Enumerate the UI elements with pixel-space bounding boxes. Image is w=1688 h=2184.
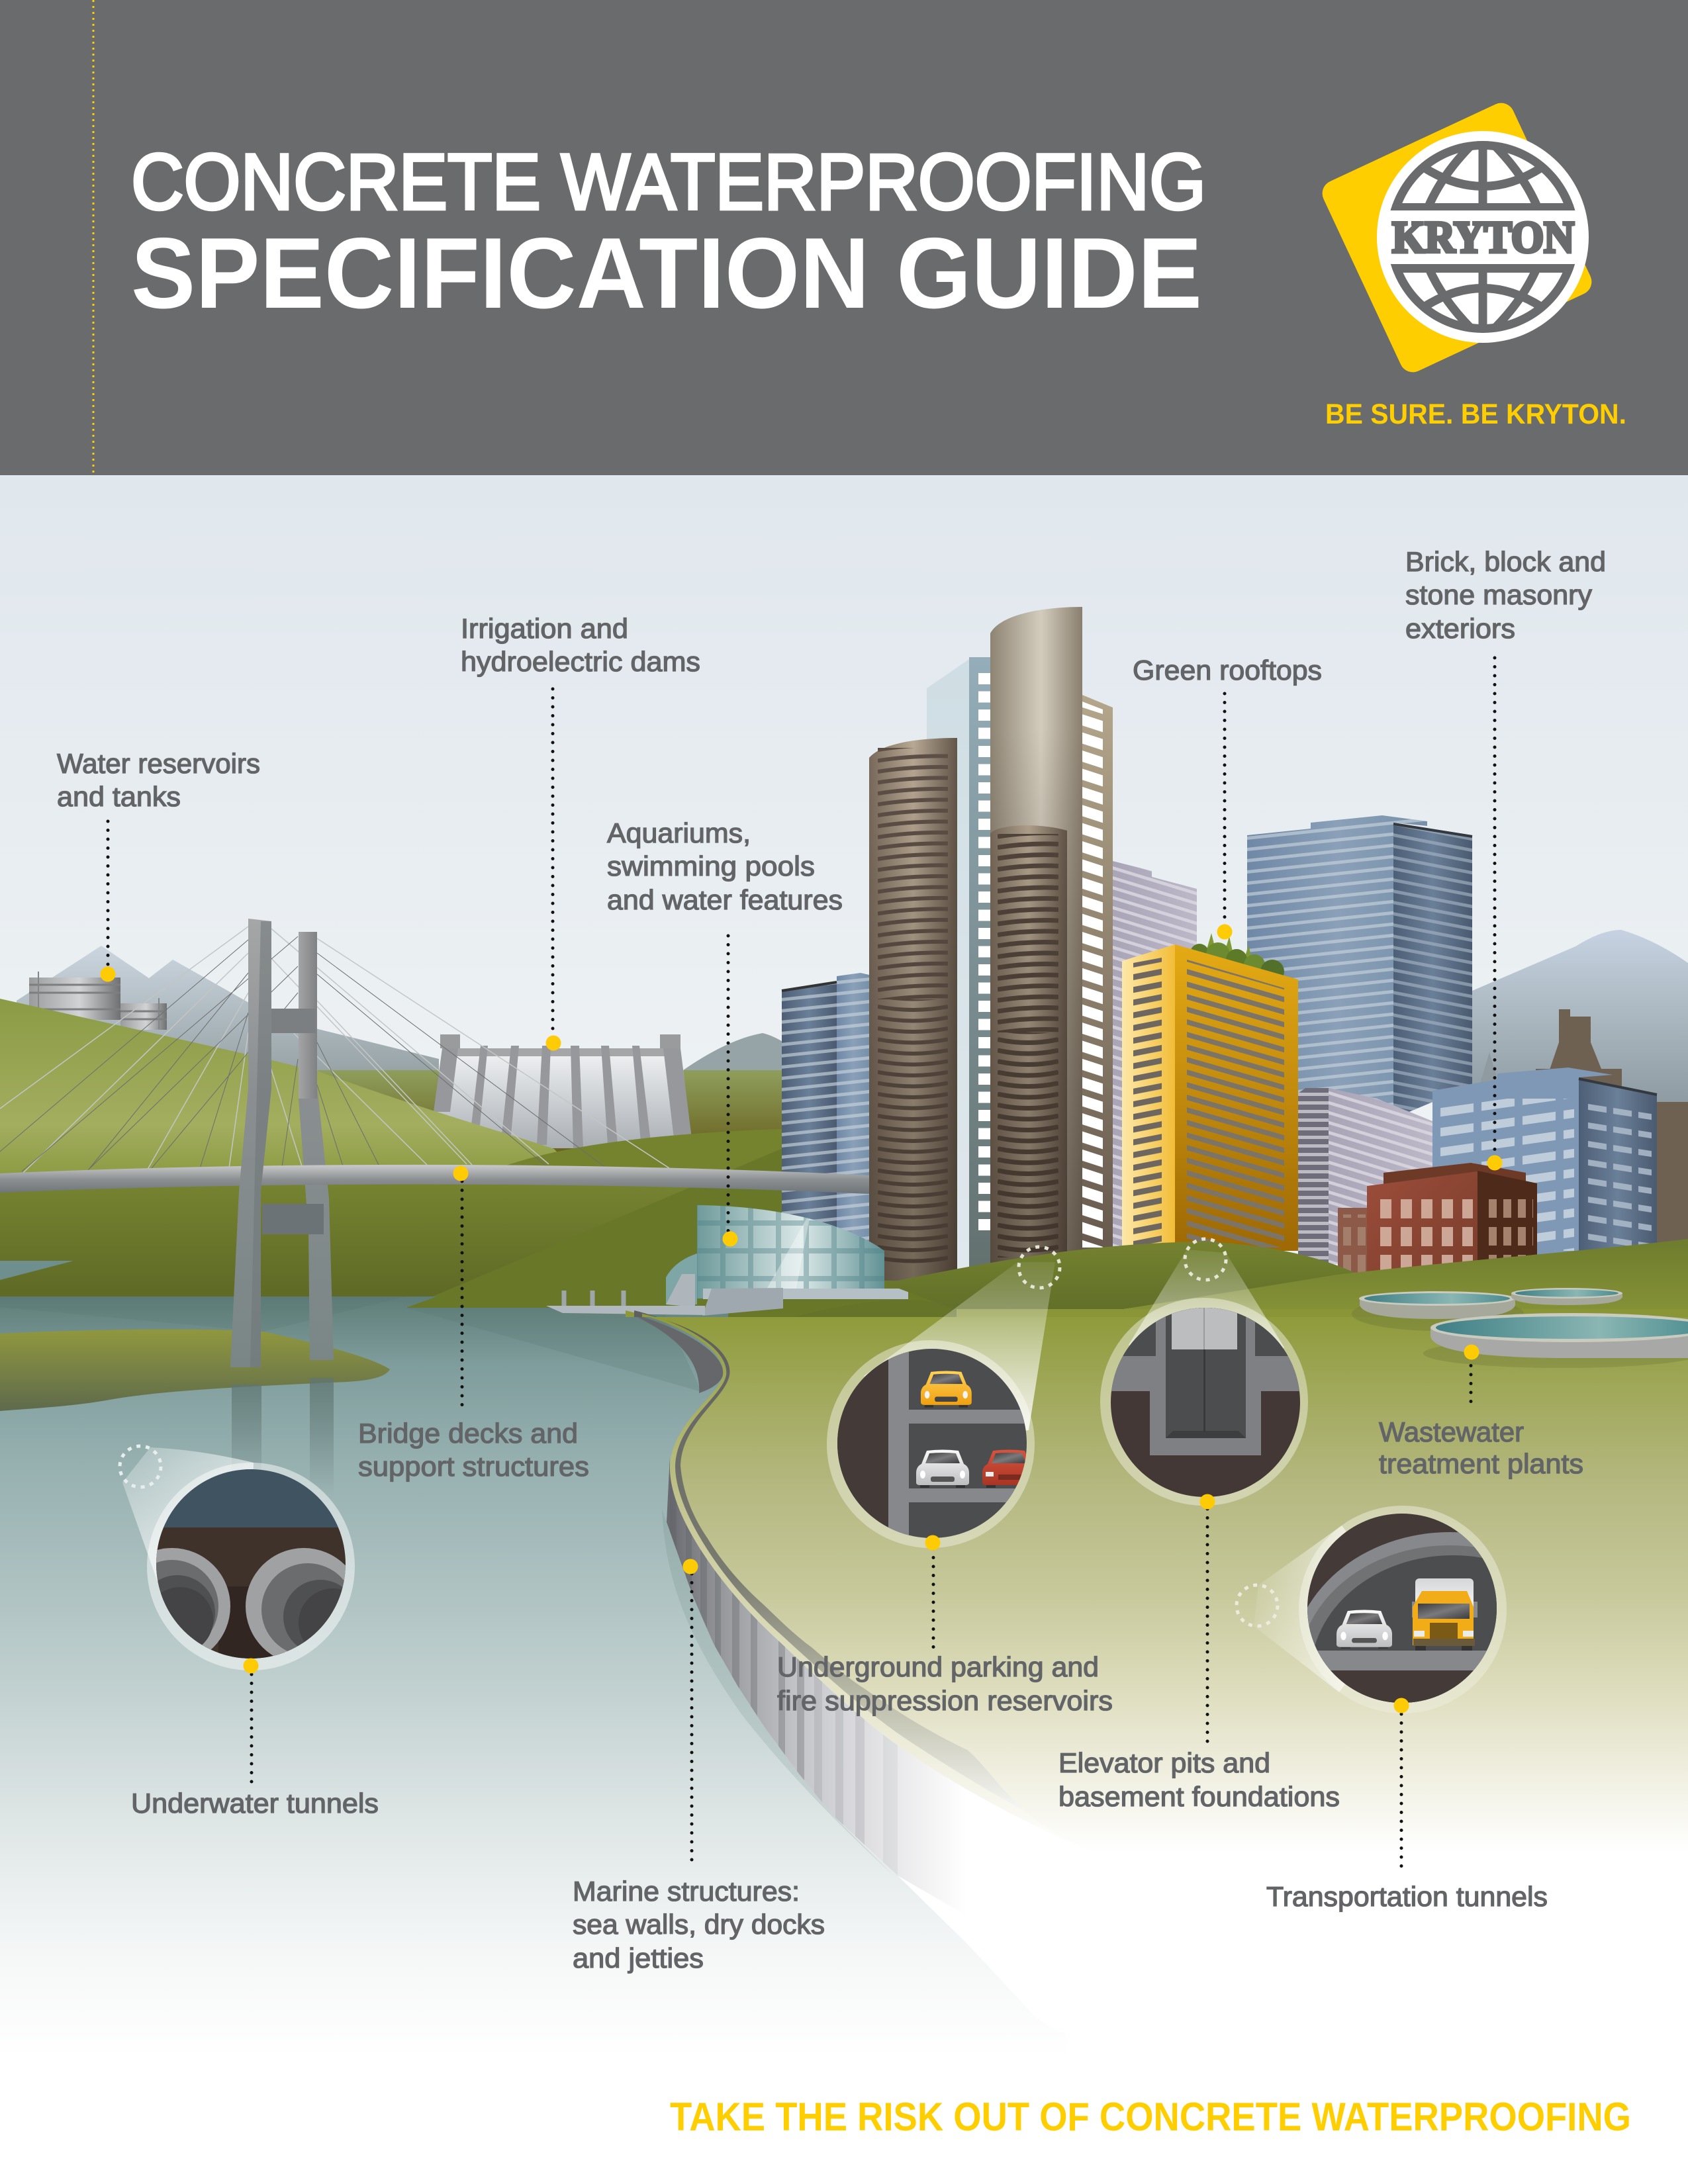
building: pale blue back tower <box>927 657 990 1271</box>
label: bridge decks: support structures <box>358 1451 589 1482</box>
label: wastewater <box>1379 1416 1583 1479</box>
yellow location dots <box>101 924 1503 1713</box>
title: SPECIFICATION GUIDE <box>131 217 1202 330</box>
label: marine structures <box>573 1876 825 1974</box>
callout: parking magnifier <box>827 1247 1060 1548</box>
label: bridge decks <box>358 1418 589 1482</box>
building: lower purple tower <box>1298 1088 1432 1264</box>
building: brick masonry <box>1338 1163 1537 1277</box>
island <box>0 1329 390 1411</box>
label: masonry: Brick, block and <box>1405 546 1606 577</box>
label: masonry <box>1405 546 1606 644</box>
building: right blue tower <box>1432 1068 1657 1257</box>
building: tan tower with white windows <box>990 607 1113 1265</box>
label: aquariums: Aquariums, <box>607 817 751 848</box>
label: elevator pits <box>1058 1747 1340 1812</box>
building: large blue tower <box>1247 815 1472 1125</box>
water <box>0 1297 1066 2058</box>
mountains <box>17 930 1688 1244</box>
label: green rooftops: Green rooftops <box>1133 655 1322 686</box>
label: water reservoirs: Water reservoirs <box>57 748 260 779</box>
far field <box>318 1070 794 1153</box>
label: marine structures: Marine structures: <box>573 1876 800 1907</box>
title: CONCRETE WATERPROOFING <box>131 138 1206 226</box>
label: marine structures: and jetties <box>573 1942 704 1974</box>
icon: hydroelectric dam <box>434 1034 692 1148</box>
label: aquariums: and water features <box>607 884 843 915</box>
sky <box>0 475 1688 1336</box>
callout: elevator pit magnifier <box>1100 1239 1308 1506</box>
callout: underwater tunnels magnifier <box>114 1446 367 1670</box>
label: aquariums <box>607 817 843 915</box>
callout: transportation tunnel magnifier <box>1235 1506 1507 1713</box>
icon: aquarium dome <box>666 1201 908 1316</box>
label: parking: Underground parking and <box>777 1651 1099 1682</box>
hills behind the bridge <box>0 999 993 1322</box>
label: elevator pits: Elevator pits and <box>1058 1747 1270 1778</box>
label: masonry: exteriors <box>1405 613 1515 644</box>
label: parking: fire suppression reservoirs <box>777 1685 1113 1716</box>
label: bridge decks: Bridge decks and <box>358 1418 578 1449</box>
label: water reservoirs <box>57 748 260 812</box>
label: underwater tunnels: Underwater tunnels <box>131 1788 379 1819</box>
label: transportation tunnels: Transportation tunnels <box>1266 1881 1548 1912</box>
label: dams: hydroelectric dams <box>461 646 700 677</box>
leader lines <box>108 658 1495 1873</box>
label: elevator pits: basement foundations <box>1058 1781 1340 1812</box>
icon: silver car <box>1336 1610 1392 1649</box>
icon: yellow car <box>921 1371 972 1408</box>
header panel <box>0 0 1688 475</box>
icon: wastewater treatment tanks <box>1352 1288 1688 1368</box>
bridge tower reflections <box>232 1378 334 1497</box>
label: masonry: stone masonry <box>1405 579 1592 610</box>
pier <box>546 1291 705 1315</box>
bridge deck and cables <box>0 919 870 1367</box>
label: marine structures: sea walls, dry docks <box>573 1909 825 1940</box>
label: aquariums: swimming pools <box>607 850 815 882</box>
label: wastewater: Wastewater <box>1379 1416 1524 1447</box>
icon: water reservoir tanks <box>29 972 167 1030</box>
land and sea wall <box>626 1309 1688 1926</box>
icon: Kryton logo: KRYTON <box>1392 212 1574 262</box>
tagline: BE SURE. BE KRYTON. <box>1325 398 1626 430</box>
icon: yellow truck <box>1412 1578 1477 1651</box>
title <box>131 138 1206 330</box>
building: left blue tower <box>782 973 869 1251</box>
label: wastewater: treatment plants <box>1379 1448 1583 1479</box>
building: brown cylindrical tower <box>869 738 957 1281</box>
icon: white car <box>916 1449 969 1488</box>
building: yellow tower with green roof <box>1122 933 1298 1251</box>
icon: Kryton logo <box>1318 99 1596 377</box>
building: purple back tower <box>1113 861 1197 1251</box>
background brown buildings <box>1477 1009 1688 1254</box>
icon: red car <box>982 1449 1026 1488</box>
label: water reservoirs: and tanks <box>57 781 181 812</box>
front green hills <box>794 1239 1688 1324</box>
building: short brown cylindrical tower <box>990 825 1067 1267</box>
label: dams <box>461 613 700 677</box>
label: dams: Irrigation and <box>461 613 628 644</box>
label: parking <box>777 1651 1113 1716</box>
